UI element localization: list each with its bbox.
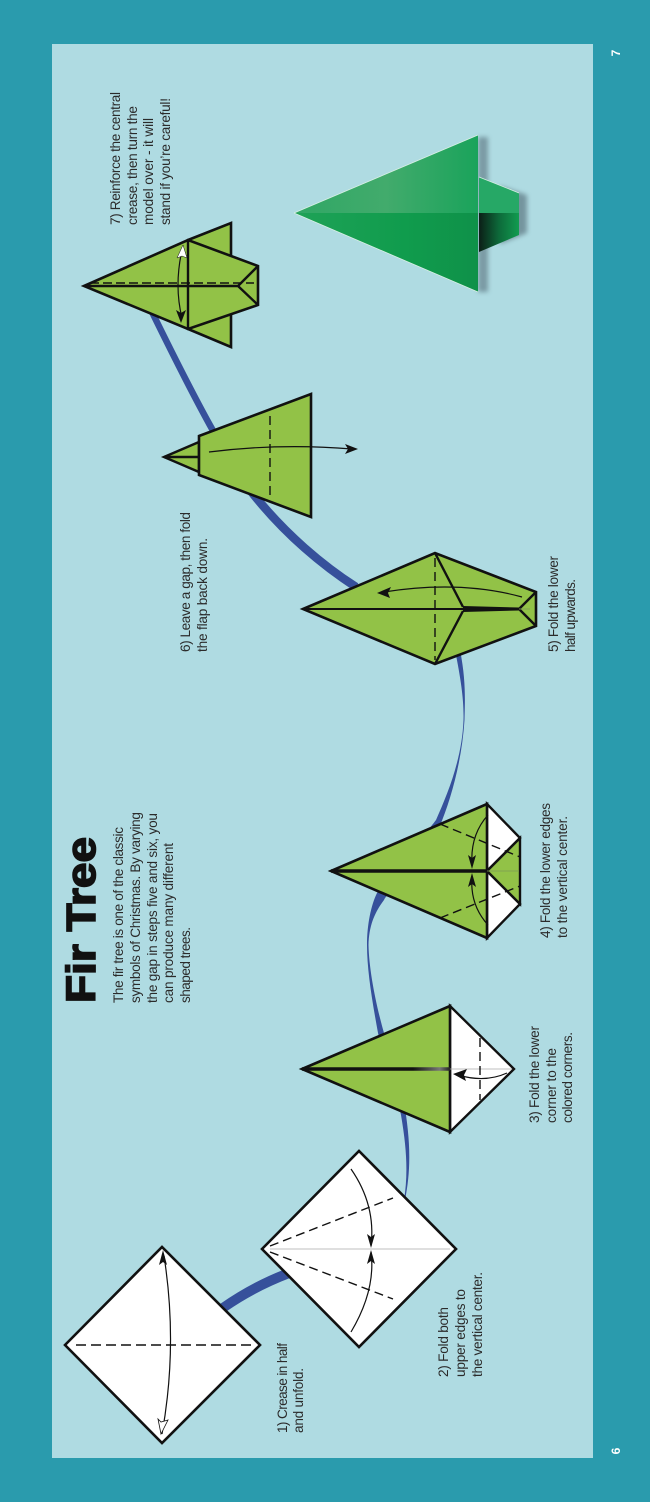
step 5 caption: 5) Fold the lower: [546, 556, 561, 652]
step 4 caption: to the vertical center.: [555, 816, 570, 938]
step 2 caption: upper edges to: [453, 1289, 468, 1377]
step 3 caption: [527, 1026, 575, 1123]
step 4 caption: 4) Fold the lower edges: [538, 803, 553, 938]
light blue panel: [52, 44, 593, 1458]
step 3 caption: corner to the: [544, 1048, 559, 1123]
step 6 caption: [178, 512, 210, 652]
finished fir tree model: [294, 135, 527, 292]
step 7 caption: crease, then turn the: [125, 106, 140, 225]
step 5 caption: half upwards.: [563, 579, 578, 652]
step 6 caption: 6) Leave a gap, then fold: [178, 512, 193, 652]
page number 6: 6: [609, 1447, 623, 1454]
step 3 diagram: [302, 1006, 514, 1132]
ribbon connecting the steps: [152, 312, 465, 1311]
step 1 caption: and unfold.: [291, 1368, 306, 1433]
step 3 caption: 3) Fold the lower: [527, 1026, 542, 1123]
intro text: [111, 812, 193, 1003]
step 1 diagram: [65, 1247, 260, 1443]
intro text: The fir tree is one of the classic: [111, 827, 126, 1003]
step 4 caption: [538, 803, 570, 938]
step 1 caption: 1) Crease in half: [275, 1343, 290, 1433]
step 1 caption: [275, 1343, 306, 1433]
intro text: can produce many different: [161, 843, 176, 1003]
intro text: symbols of Christmas. By varying: [128, 812, 143, 1003]
step 2 caption: [436, 1272, 485, 1377]
step 6 caption: the flap back down.: [195, 538, 210, 652]
step 7 caption: [108, 92, 173, 225]
step 7 diagram: [84, 223, 258, 347]
step 2 caption: 2) Fold both: [436, 1307, 451, 1377]
step 4 diagram: [331, 804, 520, 938]
step 2 diagram: [262, 1151, 456, 1347]
page number 7: 7: [609, 49, 623, 56]
step 6 diagram: [164, 394, 358, 517]
step 2 caption: the vertical center.: [470, 1272, 485, 1377]
step 7 caption: stand if you’re careful!: [158, 98, 173, 225]
step 7 caption: 7) Reinforce the central: [108, 92, 123, 225]
step 3 caption: colored corners.: [560, 1032, 575, 1123]
step 5 diagram: [303, 553, 536, 664]
step 5 caption: [546, 556, 578, 652]
intro text: shaped trees.: [178, 927, 193, 1003]
title: Fir Tree: [58, 837, 104, 1003]
step 7 caption: model over - it will: [141, 118, 156, 225]
intro text: the gap in steps five and six, you: [145, 813, 160, 1003]
